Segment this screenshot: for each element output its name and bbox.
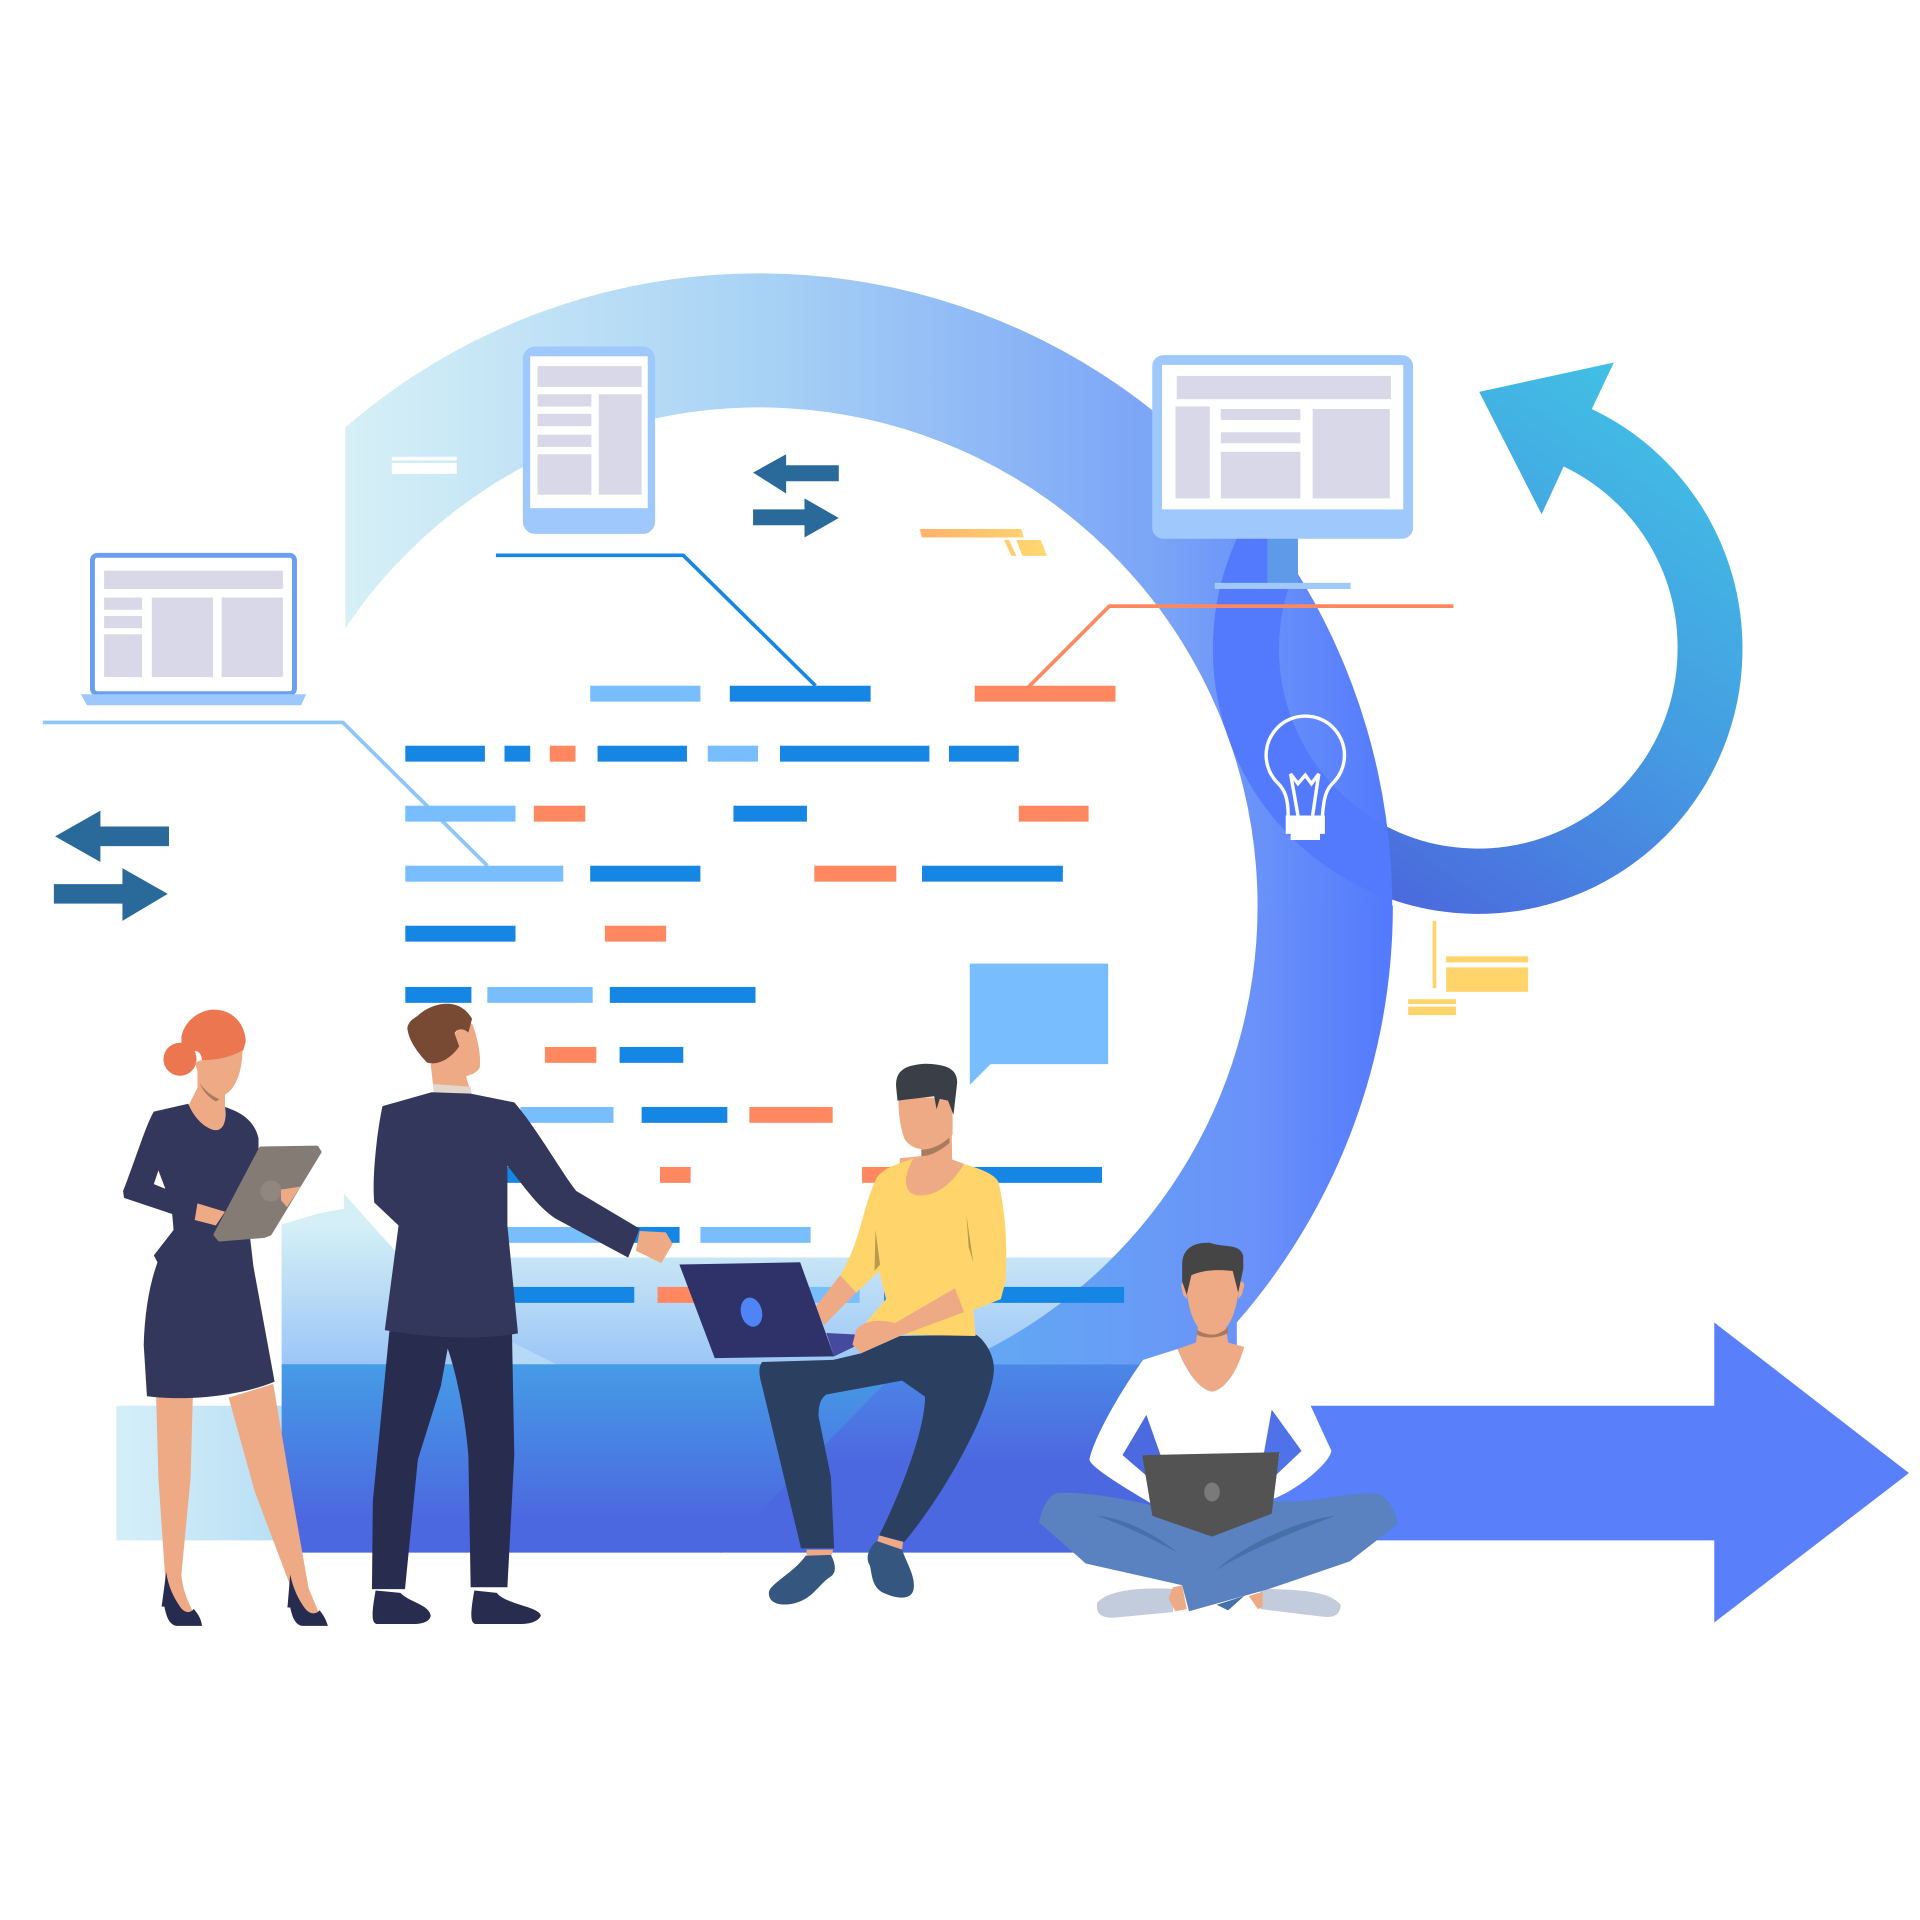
circular loop arrow: [1347, 362, 1742, 914]
yellow marks near top: [920, 529, 1047, 556]
person: cross-legged man with laptop: [1039, 1243, 1397, 1618]
icon: light bulb: [1266, 716, 1344, 840]
schedule chart bars: [405, 686, 1124, 1303]
white label marks on band: [392, 457, 457, 474]
pale block behind the woman: [116, 1406, 288, 1540]
arrows: left pair: [54, 811, 169, 921]
person: woman with tablet: [123, 1010, 328, 1626]
desktop monitor: [1152, 355, 1413, 589]
speech bubble: [970, 964, 1108, 1085]
big circular band: [345, 273, 1393, 1364]
phone device: [523, 347, 655, 534]
laptop device: [81, 555, 306, 705]
connector lines: [43, 555, 1453, 866]
yellow marks near loop: [1408, 921, 1528, 1015]
pale gradient block behind the lower chart rows: [282, 1194, 1237, 1364]
person: seated man with laptop: [679, 1064, 1006, 1604]
arrows: centre pair: [753, 454, 839, 538]
large right-pointing arrow: [1231, 1322, 1909, 1622]
bottom gradient band: [282, 1342, 1237, 1553]
person: man in suit pointing: [372, 1004, 673, 1624]
